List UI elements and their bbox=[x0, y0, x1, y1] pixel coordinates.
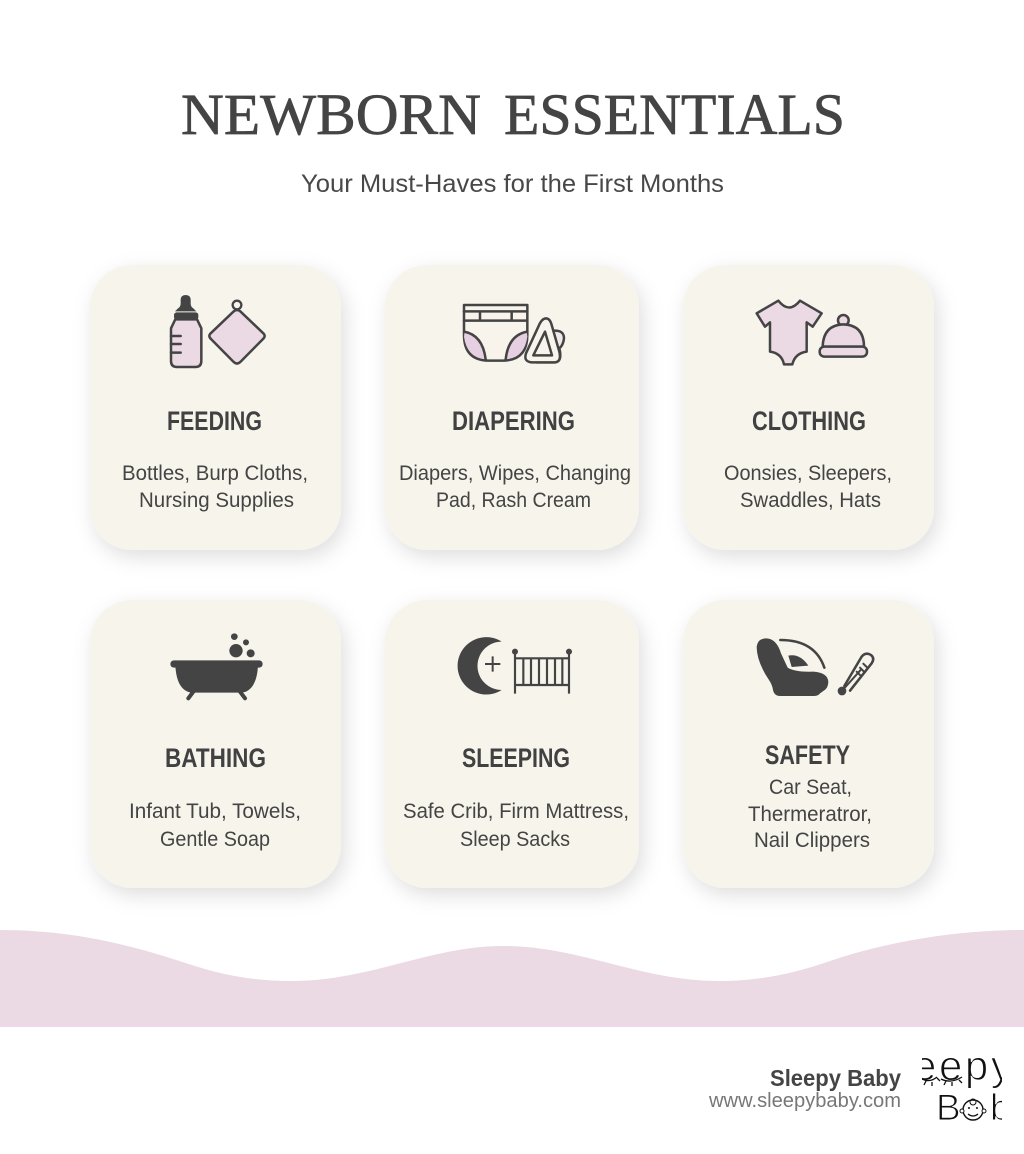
text: safety items: Nail Clippers bbox=[754, 829, 870, 852]
title: NEWBORN bbox=[181, 82, 481, 147]
heading: sleeping: SLEEPING bbox=[462, 743, 570, 773]
logo: eepy bbox=[913, 1042, 1014, 1089]
text: safety items: Car Seat, bbox=[769, 776, 852, 799]
panel: safety bbox=[683, 600, 934, 888]
brand name: Sleepy Baby bbox=[770, 1065, 901, 1091]
text: bathing items: Infant Tub, Towels, bbox=[129, 800, 301, 823]
text: sleeping items: Safe Crib, Firm Mattress, bbox=[403, 800, 629, 823]
heading: safety: SAFETY bbox=[765, 740, 850, 770]
text: feeding items: Bottles, Burp Cloths, bbox=[122, 462, 308, 485]
brand website: www.sleepybaby.com bbox=[708, 1090, 901, 1112]
subtitle: Your Must-Haves for the First Months bbox=[301, 170, 724, 198]
icon: car seat and thermometer bbox=[757, 638, 873, 696]
heading: diapering: DIAPERING bbox=[452, 406, 575, 436]
panel: sleeping bbox=[385, 600, 639, 888]
text: bathing items bbox=[129, 800, 301, 851]
panel: clothing bbox=[683, 265, 934, 550]
text: diapering items bbox=[399, 462, 631, 512]
pink wave band bbox=[0, 930, 1024, 1027]
text: clothing items: Swaddles, Hats bbox=[740, 489, 881, 512]
text: diapering items: Pad, Rash Cream bbox=[436, 489, 591, 512]
heading: bathing: BATHING bbox=[165, 743, 266, 773]
heading: feeding: FEEDING bbox=[167, 406, 262, 436]
icon: onesie and hat bbox=[757, 301, 867, 364]
icon: diaper and wipes bbox=[464, 305, 564, 362]
panel: bathing bbox=[90, 600, 341, 888]
logo: B bbox=[936, 1087, 961, 1128]
text: clothing items: Oonsies, Sleepers, bbox=[724, 462, 892, 485]
icon: bottle and burp cloth bbox=[171, 295, 265, 367]
text: safety items: Thermeratror, bbox=[748, 803, 872, 826]
panel: diapering bbox=[385, 265, 639, 550]
title bbox=[181, 82, 845, 147]
text: feeding items: Nursing Supplies bbox=[139, 489, 294, 512]
text: feeding items bbox=[122, 462, 308, 512]
text: bathing items: Gentle Soap bbox=[160, 828, 270, 851]
text: sleeping items: Sleep Sacks bbox=[460, 828, 570, 851]
title: ESSENTIALS bbox=[504, 82, 845, 147]
text: clothing items bbox=[724, 462, 892, 512]
logo bbox=[913, 1042, 1014, 1128]
text: safety items bbox=[748, 776, 872, 852]
heading: clothing: CLOTHING bbox=[752, 406, 866, 436]
logo: b bbox=[990, 1087, 1011, 1128]
panel: feeding bbox=[90, 265, 341, 550]
text: diapering items: Diapers, Wipes, Changing bbox=[399, 462, 631, 485]
icon: moon and crib bbox=[458, 637, 572, 694]
icon: bathtub bbox=[170, 633, 263, 698]
text: sleeping items bbox=[403, 800, 629, 851]
